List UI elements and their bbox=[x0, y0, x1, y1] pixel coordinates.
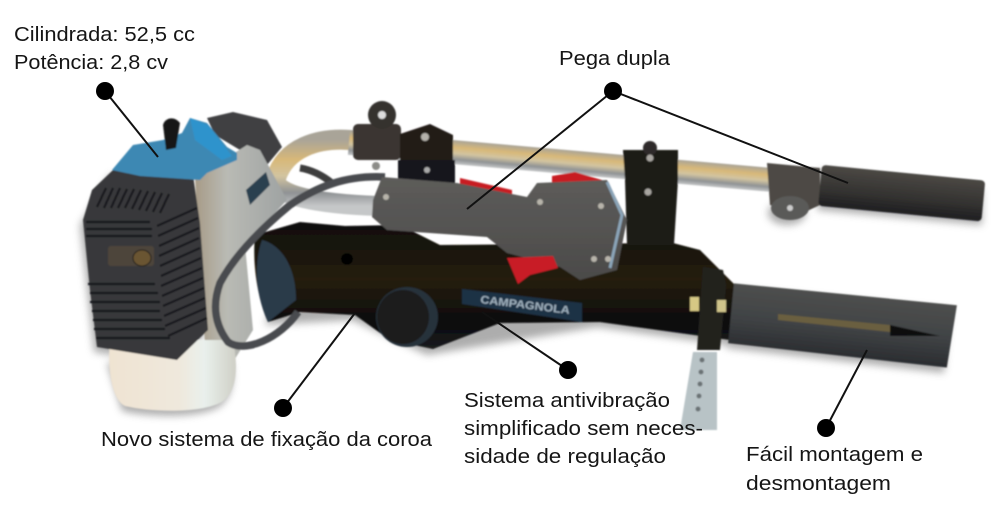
rear engine housing bbox=[207, 112, 282, 165]
label: crown fixing: Novo sistema de fixação da coroa bbox=[101, 429, 433, 451]
blue top cover bbox=[112, 118, 237, 180]
blue cover highlight bbox=[190, 118, 232, 160]
silver loop tube bbox=[276, 140, 378, 206]
label: engine specs: Cilindrada: 52,5 cc bbox=[14, 24, 195, 46]
black gear housing bbox=[254, 222, 735, 349]
handle screws bbox=[383, 194, 611, 262]
red trigger bbox=[507, 256, 558, 284]
upper handle tube bbox=[348, 131, 776, 192]
tube bracket bbox=[690, 267, 726, 350]
leader: double handle bbox=[467, 82, 848, 209]
engine vent hole bbox=[133, 250, 151, 266]
label: engine specs bbox=[14, 24, 195, 74]
clamp right large bbox=[623, 141, 678, 245]
label: double handle: Pega dupla bbox=[559, 48, 671, 70]
grey double handle bbox=[372, 177, 627, 280]
blue gear collar bbox=[257, 240, 296, 322]
engine body bbox=[83, 170, 208, 360]
Campagnola plate: CAMPAGNOLA bbox=[480, 294, 570, 317]
label: anti-vibration: simplificado sem neces- bbox=[464, 418, 703, 440]
perforated plate bbox=[680, 352, 717, 430]
clamp centre bbox=[398, 124, 455, 184]
label: easy assembly: Fácil montagem e bbox=[746, 444, 923, 466]
shaft bolt bbox=[341, 253, 353, 265]
upper clamp by grip bbox=[767, 163, 820, 220]
case label bbox=[246, 172, 270, 205]
rubber grip bbox=[818, 165, 985, 221]
engine vent bbox=[108, 246, 154, 266]
red switches bbox=[460, 172, 602, 198]
label: anti-vibration bbox=[464, 390, 703, 468]
Campagnola plate bbox=[462, 289, 582, 322]
black knob bbox=[163, 118, 180, 150]
tube slot bbox=[778, 314, 940, 336]
silver engine case bbox=[195, 145, 287, 362]
label: anti-vibration: Sistema antivibração bbox=[464, 390, 670, 412]
leader: crown fixing bbox=[274, 313, 355, 417]
lower grey tube bbox=[728, 283, 957, 368]
leader: engine bbox=[96, 82, 158, 157]
leader: easy assembly bbox=[817, 350, 867, 437]
label: easy assembly: desmontagem bbox=[746, 473, 891, 495]
clamp left bbox=[353, 101, 401, 170]
fuel tank bbox=[109, 340, 236, 411]
leader: anti-vibration bbox=[482, 312, 577, 379]
product photo: brushcutter engine and shaft bbox=[80, 101, 985, 430]
soft shadows bbox=[80, 170, 982, 416]
round disc bbox=[376, 287, 438, 347]
label: engine specs: Potência: 2,8 cv bbox=[14, 52, 168, 74]
handle rim bbox=[607, 182, 622, 268]
label: easy assembly bbox=[746, 444, 923, 495]
label: anti-vibration: sidade de regulação bbox=[464, 446, 666, 468]
engine cooling fins bbox=[86, 188, 207, 338]
fuel hose bbox=[216, 177, 385, 346]
